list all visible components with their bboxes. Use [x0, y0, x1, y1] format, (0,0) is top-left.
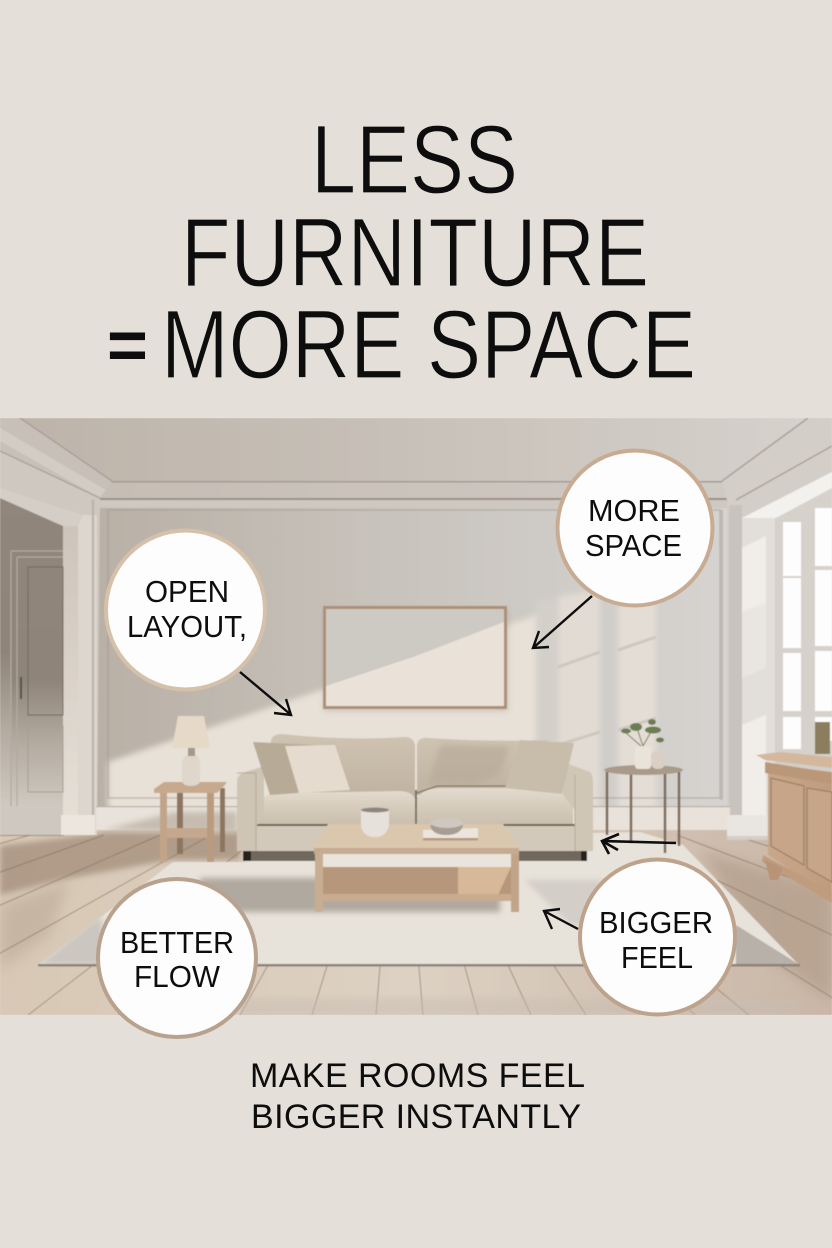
callout: bigger feel	[580, 860, 735, 1014]
window sill decor	[815, 722, 830, 754]
window panes	[783, 508, 832, 749]
pillows	[253, 742, 313, 795]
seat cushions	[258, 791, 415, 824]
callout: bigger feel: FEEL	[621, 941, 693, 975]
bottom caption	[250, 1057, 585, 1136]
crown moulding	[96, 481, 736, 508]
coffee table	[314, 808, 519, 912]
window frame	[788, 488, 832, 512]
arrow: open layout	[240, 672, 291, 715]
left side table	[154, 782, 227, 862]
title: MORE SPACE	[161, 290, 696, 399]
sofa shadow	[251, 850, 581, 861]
callout: better flow: BETTER	[120, 926, 234, 960]
callout: open layout	[106, 530, 265, 690]
base	[255, 825, 575, 851]
mug	[361, 810, 389, 837]
title	[107, 105, 696, 399]
title: =	[107, 306, 148, 384]
callout: more space: SPACE	[585, 529, 682, 563]
living room scene	[0, 418, 832, 1018]
tray and bowl	[423, 828, 478, 840]
bottom caption: BIGGER INSTANTLY	[251, 1098, 581, 1136]
callout: bigger feel: BIGGER	[599, 906, 713, 940]
arrow: sofa side	[602, 834, 676, 854]
sofa legs	[243, 850, 251, 861]
vases	[634, 764, 652, 770]
arms	[237, 766, 264, 851]
left wall and door frame	[0, 418, 112, 835]
back wall	[96, 498, 736, 813]
interior door	[11, 551, 63, 806]
skirting board	[61, 806, 767, 836]
callout: better flow: FLOW	[134, 960, 220, 994]
wood floor	[0, 830, 832, 1015]
back cushions	[271, 734, 415, 798]
sofa	[237, 734, 593, 861]
picture frame	[324, 608, 508, 711]
callout: better flow	[98, 879, 256, 1037]
callout: open layout: LAYOUT,	[127, 610, 247, 644]
arrow: bigger feel	[544, 909, 578, 929]
callout: open layout: OPEN	[145, 575, 229, 609]
plant	[621, 719, 664, 746]
cabinet foot	[766, 862, 782, 880]
table lamp	[172, 716, 210, 786]
arrow: more space	[533, 596, 592, 648]
title: FURNITURE	[181, 198, 649, 307]
ceiling	[22, 418, 805, 482]
bottom caption: MAKE ROOMS FEEL	[250, 1057, 585, 1095]
title: LESS	[311, 105, 518, 214]
callout: more space	[558, 450, 712, 606]
callout: more space: MORE	[588, 494, 680, 528]
right wall and window	[722, 418, 832, 840]
round side table	[604, 719, 683, 853]
wooden cabinet	[756, 722, 832, 903]
floor planks	[0, 835, 832, 1015]
area rug	[38, 832, 800, 966]
